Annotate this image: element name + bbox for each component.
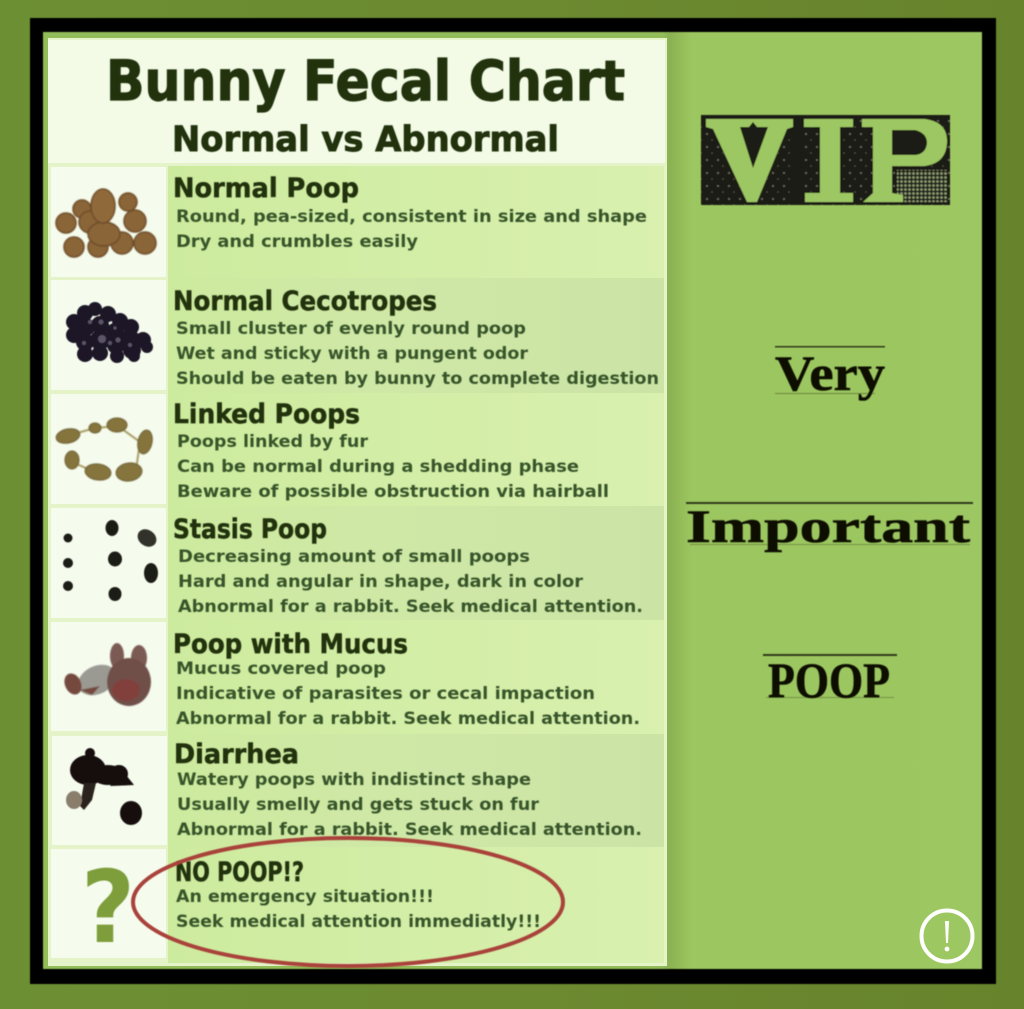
- heading: Stasis Poop: [173, 514, 327, 545]
- heading: Normal Cecotropes: [173, 286, 437, 317]
- word: Important: Important: [686, 501, 970, 553]
- letter P: [862, 119, 947, 202]
- description: Abnormal for a rabbit. Seek medical attention.: [176, 709, 640, 729]
- description: [176, 659, 640, 729]
- description: Small cluster of evenly round poop: [176, 319, 526, 339]
- subtitle: Normal vs Abnormal: [172, 120, 559, 160]
- heading: Linked Poops: [173, 399, 360, 430]
- description: Seek medical attention immediatly!!!: [176, 912, 541, 932]
- description: Beware of possible obstruction via hairball: [177, 482, 609, 502]
- callout: red ellipse: [133, 838, 563, 966]
- description: Should be eaten by bunny to complete digestion: [176, 369, 659, 389]
- description: Wet and sticky with a pungent odor: [176, 344, 529, 364]
- description: Abnormal for a rabbit. Seek medical attention.: [177, 820, 642, 840]
- description: Mucus covered poop: [176, 659, 386, 679]
- heading: Diarrhea: [174, 739, 299, 770]
- heading: Poop with Mucus: [173, 629, 408, 660]
- title block: [48, 40, 665, 163]
- icon: linked pellets: [55, 418, 154, 483]
- icon: stasis pellets: [63, 520, 160, 601]
- icon: diarrhea: [66, 748, 142, 825]
- description: Hard and angular in shape, dark in color: [178, 572, 584, 592]
- word: Very: Very: [775, 345, 885, 401]
- description: Poops linked by fur: [177, 432, 369, 452]
- row: linked poops: [51, 393, 664, 506]
- description: An emergency situation!!!: [176, 887, 434, 907]
- heading: Normal Poop: [173, 173, 359, 204]
- row: diarrhea: [52, 734, 664, 847]
- row: normal cecotropes: [51, 278, 664, 393]
- row: no poop: [51, 847, 664, 966]
- description: Abnormal for a rabbit. Seek medical attention.: [178, 597, 643, 617]
- description: Watery poops with indistinct shape: [177, 770, 531, 790]
- description: Indicative of parasites or cecal impaction: [176, 684, 595, 704]
- VIP stamp: [701, 115, 950, 205]
- word: POOP: POOP: [768, 652, 890, 708]
- description: [176, 207, 647, 252]
- letter I: [804, 119, 853, 202]
- description: [177, 770, 642, 840]
- icon: alert badge: [922, 910, 972, 962]
- description: Decreasing amount of small poops: [178, 547, 530, 567]
- description: Round, pea-sized, consistent in size and shape: [176, 207, 647, 227]
- row: stasis poop: [51, 506, 664, 620]
- letter V: [706, 119, 793, 202]
- description: [176, 887, 541, 932]
- title: Bunny Fecal Chart: [106, 49, 625, 113]
- icon: cecotropes cluster: [66, 302, 153, 363]
- icon: mucus covered poop: [61, 643, 151, 706]
- row: poop with mucus: [51, 620, 664, 734]
- heading: NO POOP!?: [175, 857, 304, 888]
- panel: fecal chart: [48, 38, 667, 966]
- icon: normal poop pellets: [56, 189, 156, 257]
- description: [176, 319, 659, 389]
- icon: question mark: ?: [81, 849, 135, 966]
- row: normal poop: [51, 166, 664, 278]
- description: [178, 547, 643, 617]
- description: [177, 432, 609, 502]
- description: Dry and crumbles easily: [176, 232, 418, 252]
- description: Usually smelly and gets stuck on fur: [177, 795, 540, 815]
- description: Can be normal during a shedding phase: [177, 457, 579, 477]
